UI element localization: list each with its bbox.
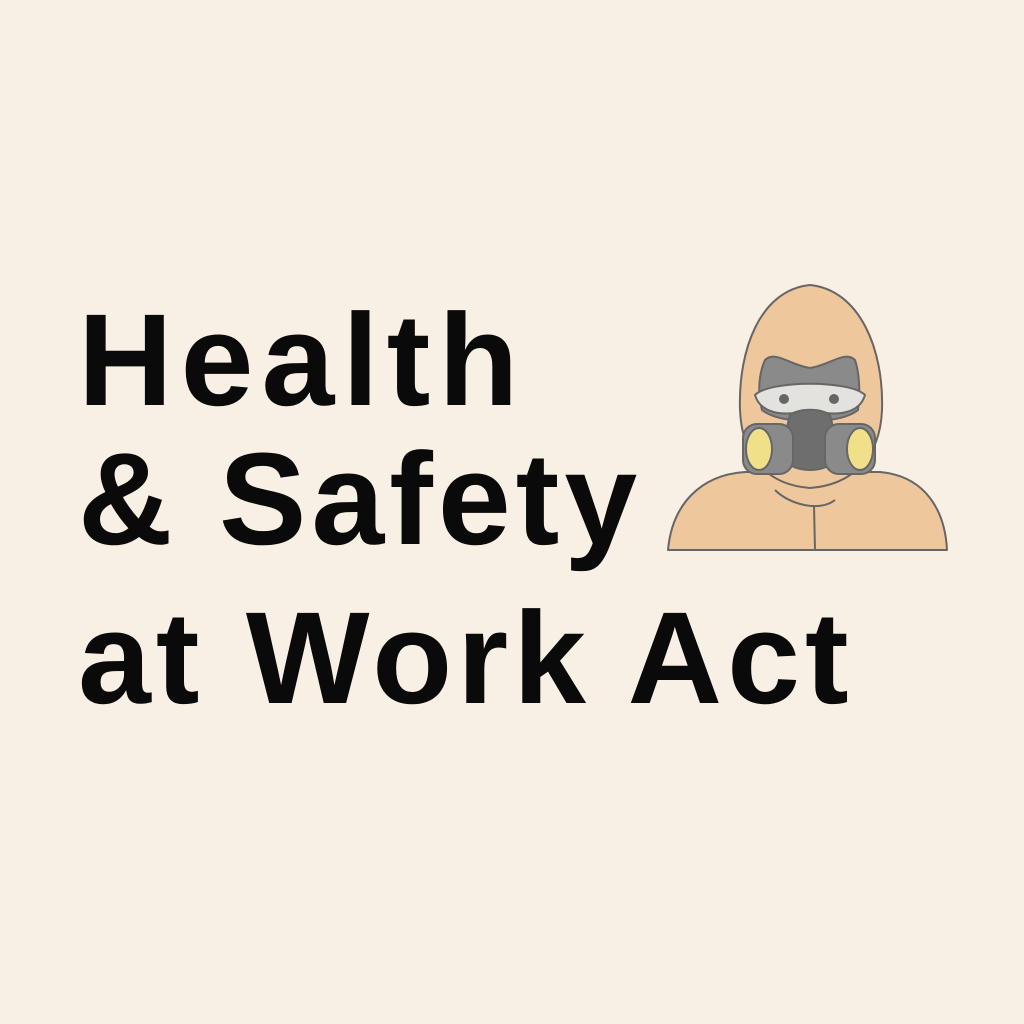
title: Health bbox=[78, 286, 526, 433]
title: & Safety bbox=[78, 425, 642, 572]
title: at Work Act bbox=[78, 584, 854, 731]
